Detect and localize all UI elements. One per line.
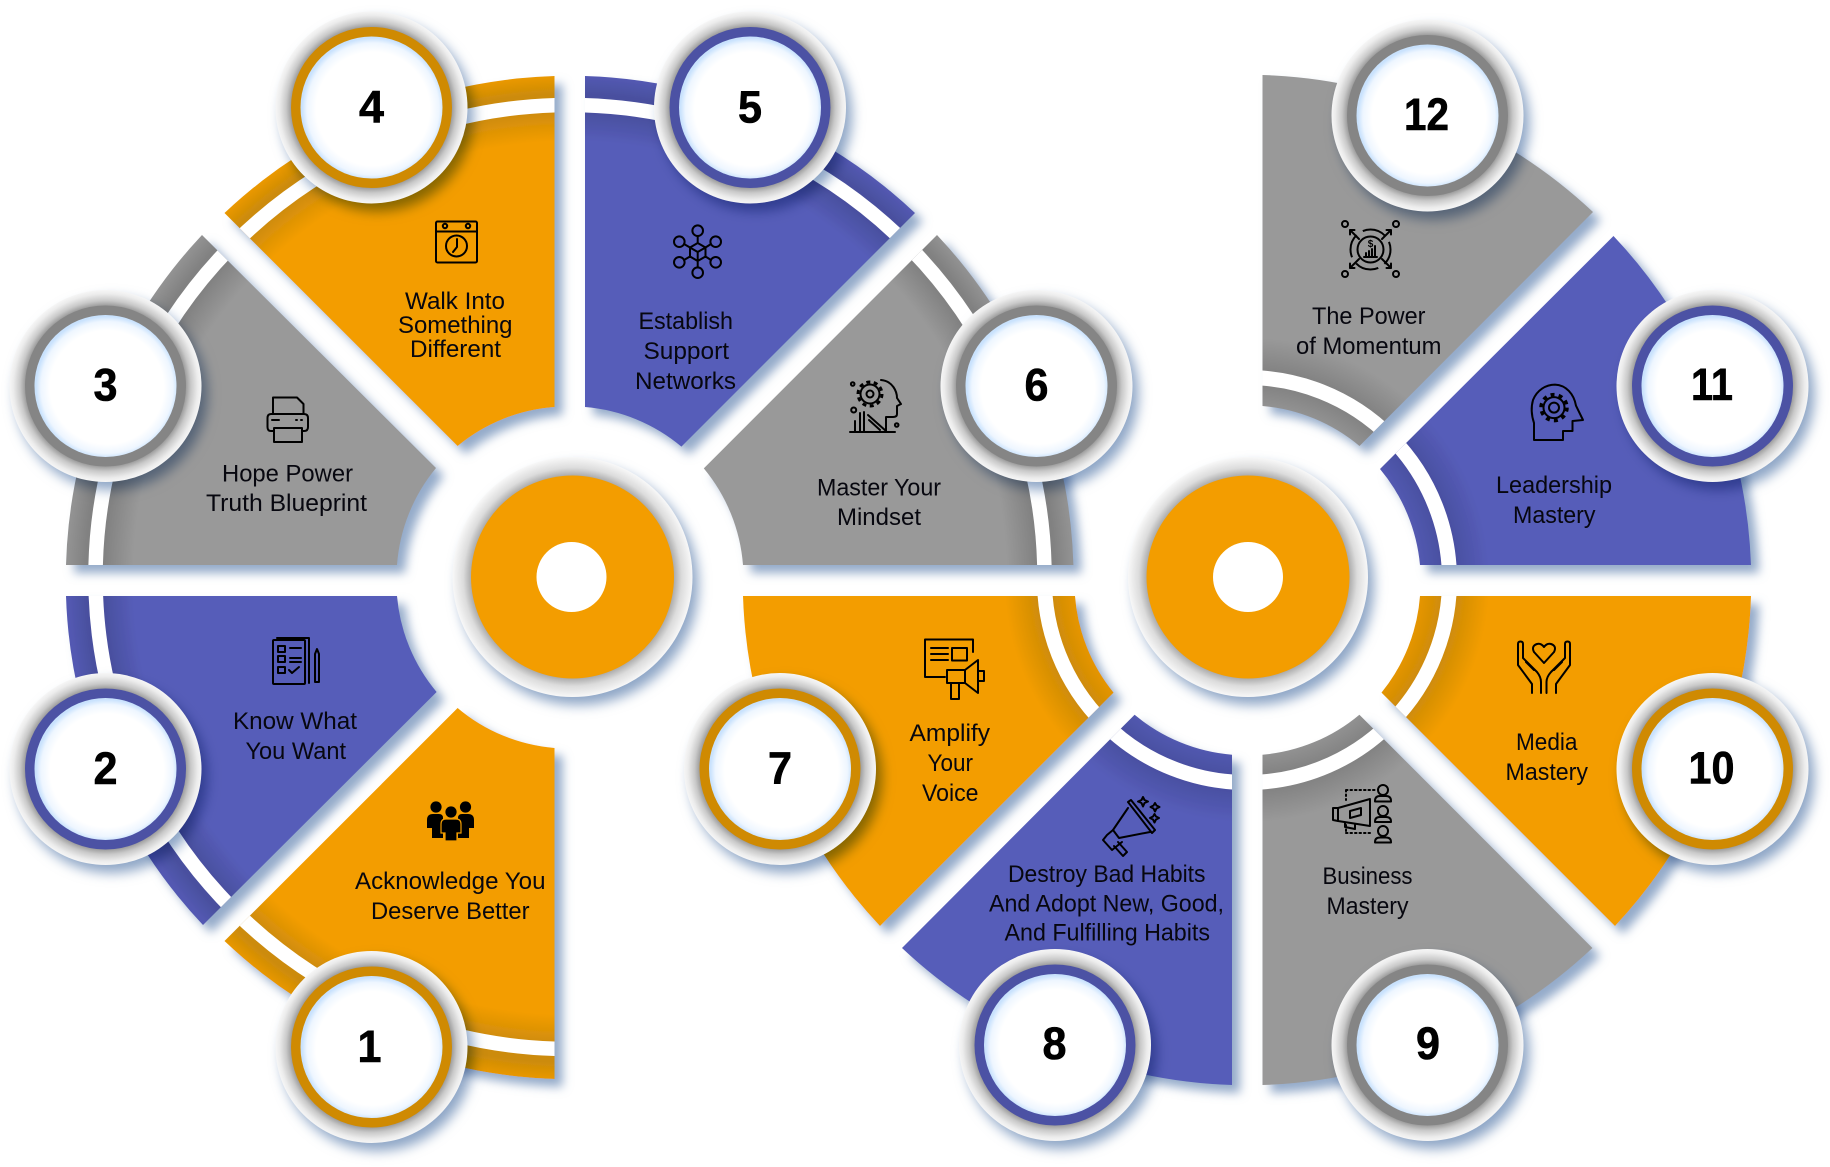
label text bbox=[206, 460, 367, 517]
panel: sector 1 Acknowledge You Deserve Better bbox=[224, 708, 570, 1094]
badge 1 bbox=[276, 951, 474, 1151]
badge 4 bbox=[276, 12, 474, 212]
badge 8 bbox=[959, 949, 1157, 1149]
panel: sector 10 Media Mastery bbox=[1382, 596, 1766, 938]
label text bbox=[635, 308, 736, 395]
label text bbox=[1296, 303, 1442, 360]
icon: mind gear head bbox=[850, 380, 901, 432]
badge 4: 4 bbox=[359, 82, 384, 132]
panel: sector 11 Leadership Mastery bbox=[1380, 236, 1766, 580]
icon: head with gear bbox=[1532, 385, 1583, 440]
label text: Voice bbox=[922, 780, 978, 807]
label text: Mindset bbox=[837, 504, 921, 531]
label text bbox=[233, 708, 357, 765]
icon: clock calendar bbox=[436, 222, 477, 262]
label text: Different bbox=[410, 336, 501, 363]
label text: Truth Blueprint bbox=[206, 490, 367, 517]
label text: Deserve Better bbox=[371, 898, 530, 925]
icon: money growth arrows bbox=[1342, 221, 1399, 277]
label text: Leadership bbox=[1496, 472, 1612, 499]
icon: megaphone sparkles bbox=[1103, 797, 1160, 856]
label text: Something bbox=[398, 312, 512, 339]
badge 6: 6 bbox=[1024, 360, 1048, 410]
label text: Mastery bbox=[1326, 893, 1408, 920]
label text: Master Your bbox=[817, 474, 941, 502]
label text: Amplify bbox=[910, 720, 990, 747]
label text: Mastery bbox=[1506, 759, 1588, 786]
label text bbox=[355, 868, 546, 925]
label text: Support bbox=[644, 338, 729, 365]
badge 7 bbox=[684, 673, 882, 873]
hub: right wheel centre bbox=[1128, 457, 1374, 705]
badge 3 bbox=[10, 290, 208, 490]
label text bbox=[989, 861, 1224, 946]
label text bbox=[817, 474, 941, 531]
panel: sector 12 The Power of Momentum bbox=[1262, 75, 1605, 458]
label text: Media bbox=[1516, 729, 1578, 756]
badge 5 bbox=[654, 12, 852, 212]
icon: printer bbox=[268, 398, 308, 442]
badge 2 bbox=[10, 673, 208, 873]
label text: Destroy Bad Habits bbox=[1008, 861, 1206, 888]
label text bbox=[1496, 472, 1612, 529]
panel: sector 5 Establish Support Networks bbox=[585, 76, 927, 459]
panel: sector 2 Know What You Want bbox=[66, 596, 449, 937]
panel: sector 7 Amplify Your Voice bbox=[743, 596, 1126, 938]
panel: sector 3 Hope Power Truth Blueprint bbox=[66, 235, 448, 580]
icon: megaphone audience bbox=[1333, 785, 1391, 842]
icon text: dollar sign: $ bbox=[1368, 239, 1374, 250]
panel: sector 6 Master Your Mindset bbox=[704, 235, 1088, 580]
label text: And Adopt New, Good, bbox=[989, 890, 1224, 918]
icon: family group bbox=[427, 801, 474, 841]
badge 6 bbox=[940, 290, 1138, 490]
icon: checklist bbox=[273, 638, 319, 684]
label text: The Power bbox=[1312, 303, 1426, 330]
label text: of Momentum bbox=[1296, 333, 1442, 360]
label text bbox=[1506, 729, 1588, 786]
badge 7: 7 bbox=[768, 742, 792, 794]
badge 9: 9 bbox=[1416, 1018, 1440, 1069]
icon: presentation speaker bbox=[925, 640, 984, 699]
badge 1: 1 bbox=[358, 1021, 382, 1072]
panel: sector 9 Business Mastery bbox=[1262, 714, 1604, 1100]
label text: You Want bbox=[246, 738, 346, 765]
panel: sector 4 Walk Into Something Different bbox=[224, 76, 570, 458]
badge 8: 8 bbox=[1042, 1018, 1066, 1069]
label text: Hope Power bbox=[222, 460, 353, 488]
badge 12 bbox=[1332, 20, 1530, 220]
icon: hands holding heart bbox=[1518, 642, 1570, 693]
label text: Mastery bbox=[1513, 502, 1596, 529]
label text: Networks bbox=[635, 368, 736, 395]
label text: Acknowledge You bbox=[355, 868, 546, 895]
badge 12: 12 bbox=[1404, 89, 1449, 140]
label text: And Fulfilling Habits bbox=[1004, 920, 1210, 946]
badge 2: 2 bbox=[94, 743, 118, 794]
badge 5: 5 bbox=[738, 82, 762, 132]
label text: Your bbox=[928, 750, 973, 777]
label text bbox=[1322, 863, 1412, 920]
badge 3: 3 bbox=[94, 360, 118, 410]
badge 11 bbox=[1616, 290, 1814, 490]
label text: Know What bbox=[233, 708, 357, 735]
badge 10 bbox=[1616, 673, 1814, 873]
icon: network cube bbox=[674, 225, 721, 278]
label text: Walk Into bbox=[405, 288, 505, 315]
badge 11: 11 bbox=[1691, 359, 1733, 410]
label text: Business bbox=[1322, 863, 1412, 890]
label text bbox=[398, 288, 512, 363]
label text bbox=[910, 720, 990, 807]
panel: sector 8 Destroy Bad Habits bbox=[902, 714, 1247, 1100]
badge 10: 10 bbox=[1688, 742, 1734, 794]
badge 9 bbox=[1332, 949, 1530, 1149]
hub: left wheel centre bbox=[452, 457, 698, 705]
label text: Establish bbox=[638, 308, 733, 335]
